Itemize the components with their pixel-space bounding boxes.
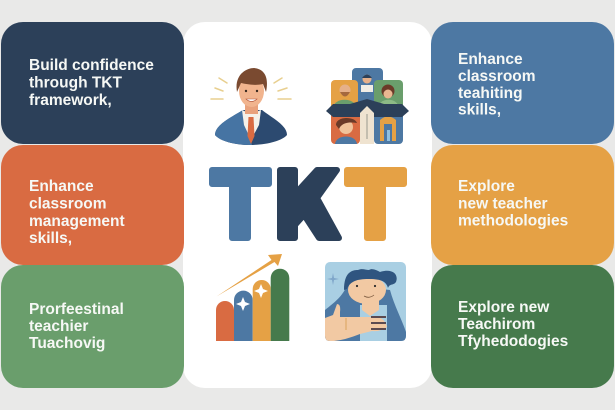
text: classroom management: classroom <box>29 196 107 212</box>
text: classroom management: skills, <box>29 230 72 247</box>
icon: learner portrait <box>325 262 406 341</box>
icon: classroom group <box>326 68 409 144</box>
text: explore new: Teachirom <box>458 316 535 333</box>
text: build confidence: through TKT <box>29 74 123 92</box>
text: build confidence: Build confidence <box>29 57 154 74</box>
icon: growth bar chart <box>216 254 289 341</box>
text: teacher methodologies: Explore <box>458 178 515 195</box>
letter K navy <box>280 170 339 238</box>
text: explore new: Tfyhedodogies <box>458 333 568 350</box>
text: professional teacher: teachier <box>29 318 88 335</box>
panel: classroom management <box>1 145 184 265</box>
text: professional teacher: Tuachovig <box>29 335 105 352</box>
icon: smiling teacher <box>211 68 291 145</box>
panel: teacher methodologies <box>431 145 614 265</box>
text: teaching skills: teahiting <box>458 85 523 102</box>
centre white panel <box>183 22 432 388</box>
text: explore new: Explore new <box>458 299 550 316</box>
TKT logo <box>212 170 404 238</box>
text: teacher methodologies: new teacher <box>458 196 548 212</box>
panel: professional teacher <box>1 265 184 388</box>
text: classroom management: Enhance <box>29 178 94 195</box>
text: teaching skills: skills, <box>458 102 501 118</box>
text: teaching skills: Enhance <box>458 51 523 68</box>
letter T yellow <box>347 170 404 238</box>
text: build confidence: framework, <box>29 92 112 109</box>
icon: growth arrow <box>216 254 282 296</box>
text: teaching skills: classroom <box>458 68 536 85</box>
text: classroom management: management <box>29 213 125 230</box>
text: teacher methodologies: methodologies <box>458 212 568 230</box>
panel: build confidence <box>1 22 184 144</box>
letter T blue <box>212 170 269 238</box>
panel: teaching skills <box>431 22 614 144</box>
panel: explore new <box>431 265 614 388</box>
text: professional teacher: Prorfeestinal <box>29 301 124 318</box>
